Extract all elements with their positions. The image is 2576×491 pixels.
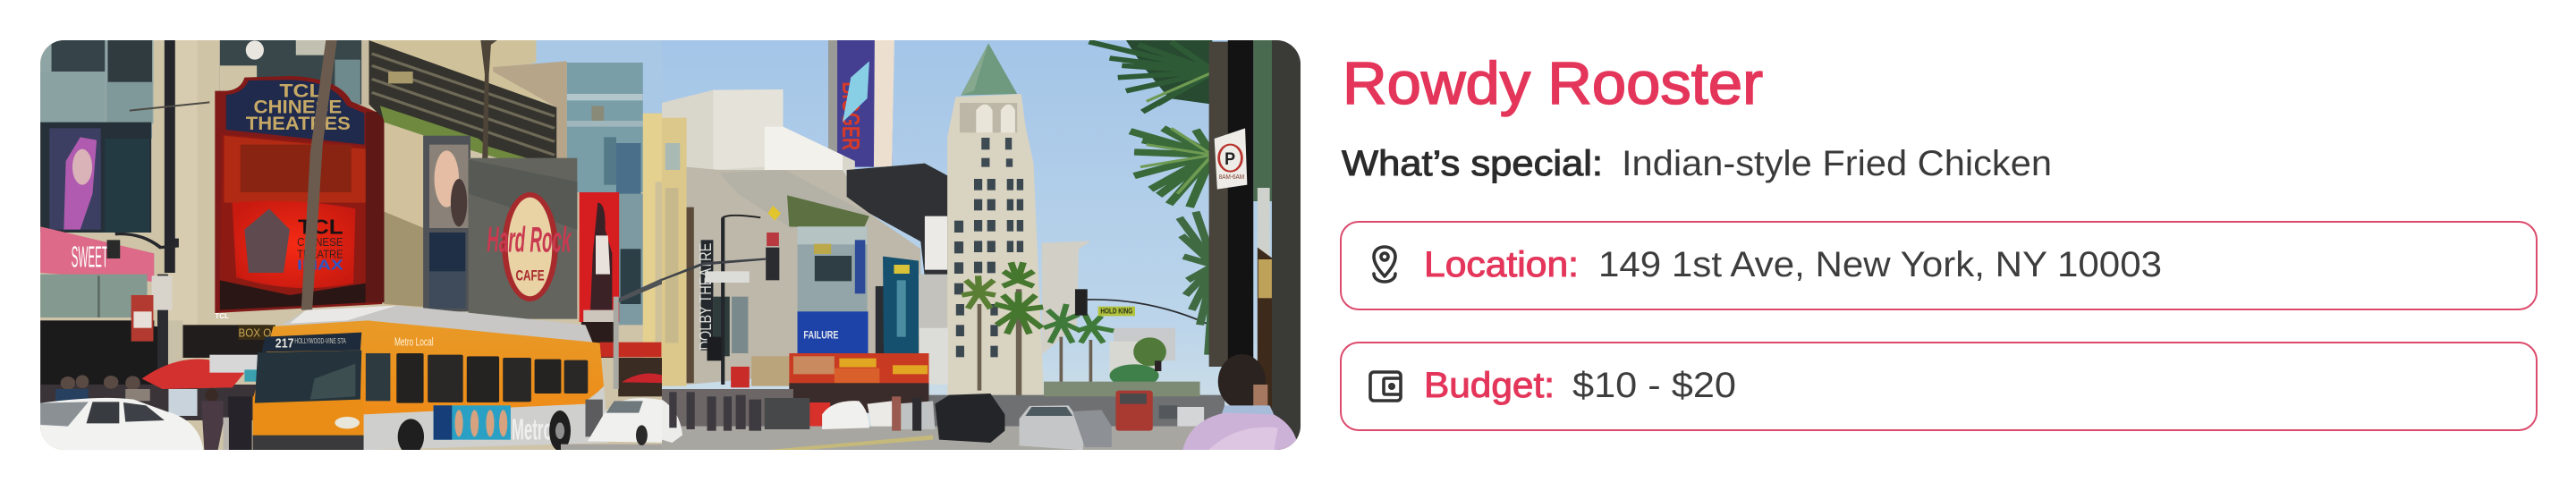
- Metro bus: Metro: [512, 413, 553, 446]
- Dolby Theatre facade: DOLBY THEATRE: [697, 243, 716, 351]
- TCL Chinese Theatre marquee: THEATRES: [246, 114, 351, 134]
- photo left half: theatre, Hard Rock, bus: SWEET: [72, 240, 108, 274]
- budget text: [1424, 366, 1736, 405]
- budget text: Budget:: [1424, 366, 1555, 405]
- what's special line: What’s special:: [1342, 144, 1603, 183]
- photo left half: theatre, Hard Rock, bus: Hard Rock: [487, 220, 572, 260]
- location text: 149 1st Ave, New York, NY 10003: [1598, 245, 2162, 284]
- TCL Chinese Theatre marquee: TCL: [298, 216, 343, 239]
- what's special line: Indian-style Fried Chicken: [1622, 144, 2052, 183]
- street and traffic: [662, 360, 1224, 452]
- Metro bus: HOLLYWOOD-VINE STA: [294, 337, 346, 345]
- sidewalk crowd and umbrella: [40, 355, 261, 450]
- photo left half: theatre, Hard Rock, bus: [27, 38, 672, 454]
- icon: wallet: [1370, 372, 1401, 401]
- mid-street palm trees: [961, 261, 1207, 395]
- TCL Chinese Theatre marquee: THEATRE: [297, 248, 343, 261]
- location card: [1341, 222, 2537, 309]
- Metro bus: [253, 306, 608, 454]
- street lamp and signs: [107, 40, 264, 402]
- mid-street palm trees: HOLD KING: [1100, 308, 1132, 316]
- banner: BIGGER: [836, 81, 864, 150]
- street lamp and signs: TCL: [215, 312, 229, 320]
- photo right half: tower, street, palms: [662, 38, 1302, 452]
- foreground palm, pole and parking sign: [1089, 40, 1302, 450]
- Hard Rock Cafe sign: CAFE: [515, 267, 545, 284]
- TCL Chinese Theatre marquee: TCL: [279, 80, 323, 101]
- TCL Chinese Theatre marquee: IMAX: [297, 258, 343, 273]
- photo: Hollywood Boulevard street scene: [27, 38, 1302, 454]
- TCL Chinese Theatre marquee: [215, 76, 382, 313]
- red tour bus: [789, 353, 928, 427]
- TCL Chinese Theatre marquee: CHINESE: [297, 235, 343, 249]
- banner: [828, 40, 894, 167]
- foreground man in lilac hoodie: [1182, 354, 1299, 450]
- icon: location pin: [1374, 247, 1395, 282]
- Metro bus: 217: [275, 335, 294, 351]
- foreground palm, pole and parking sign: 8AM-6AM: [1219, 173, 1244, 181]
- what's special line: [1342, 144, 2052, 183]
- TCL Chinese Theatre marquee: CHINESE: [253, 97, 342, 118]
- Hard Rock Cafe sign: [469, 158, 577, 319]
- Metro bus: Metro Local: [394, 336, 434, 349]
- Hollywood tower: [947, 43, 1044, 396]
- glass building and signs: [798, 226, 948, 385]
- dark scaffold building: [847, 164, 953, 277]
- foreground palm, pole and parking sign: P: [1224, 149, 1235, 168]
- photo left half: theatre, Hard Rock, bus: BOX O: [238, 326, 271, 340]
- budget card: [1341, 343, 2537, 430]
- white cars and road: [40, 398, 672, 452]
- glass building and signs: FAILURE: [803, 329, 839, 342]
- slatted terrace: [369, 40, 556, 158]
- location text: Location:: [1424, 245, 1579, 284]
- Dolby Theatre facade: [662, 118, 791, 387]
- budget text: $10 - $20: [1572, 366, 1736, 405]
- restaurant title: Rowdy Rooster: [1343, 50, 1763, 117]
